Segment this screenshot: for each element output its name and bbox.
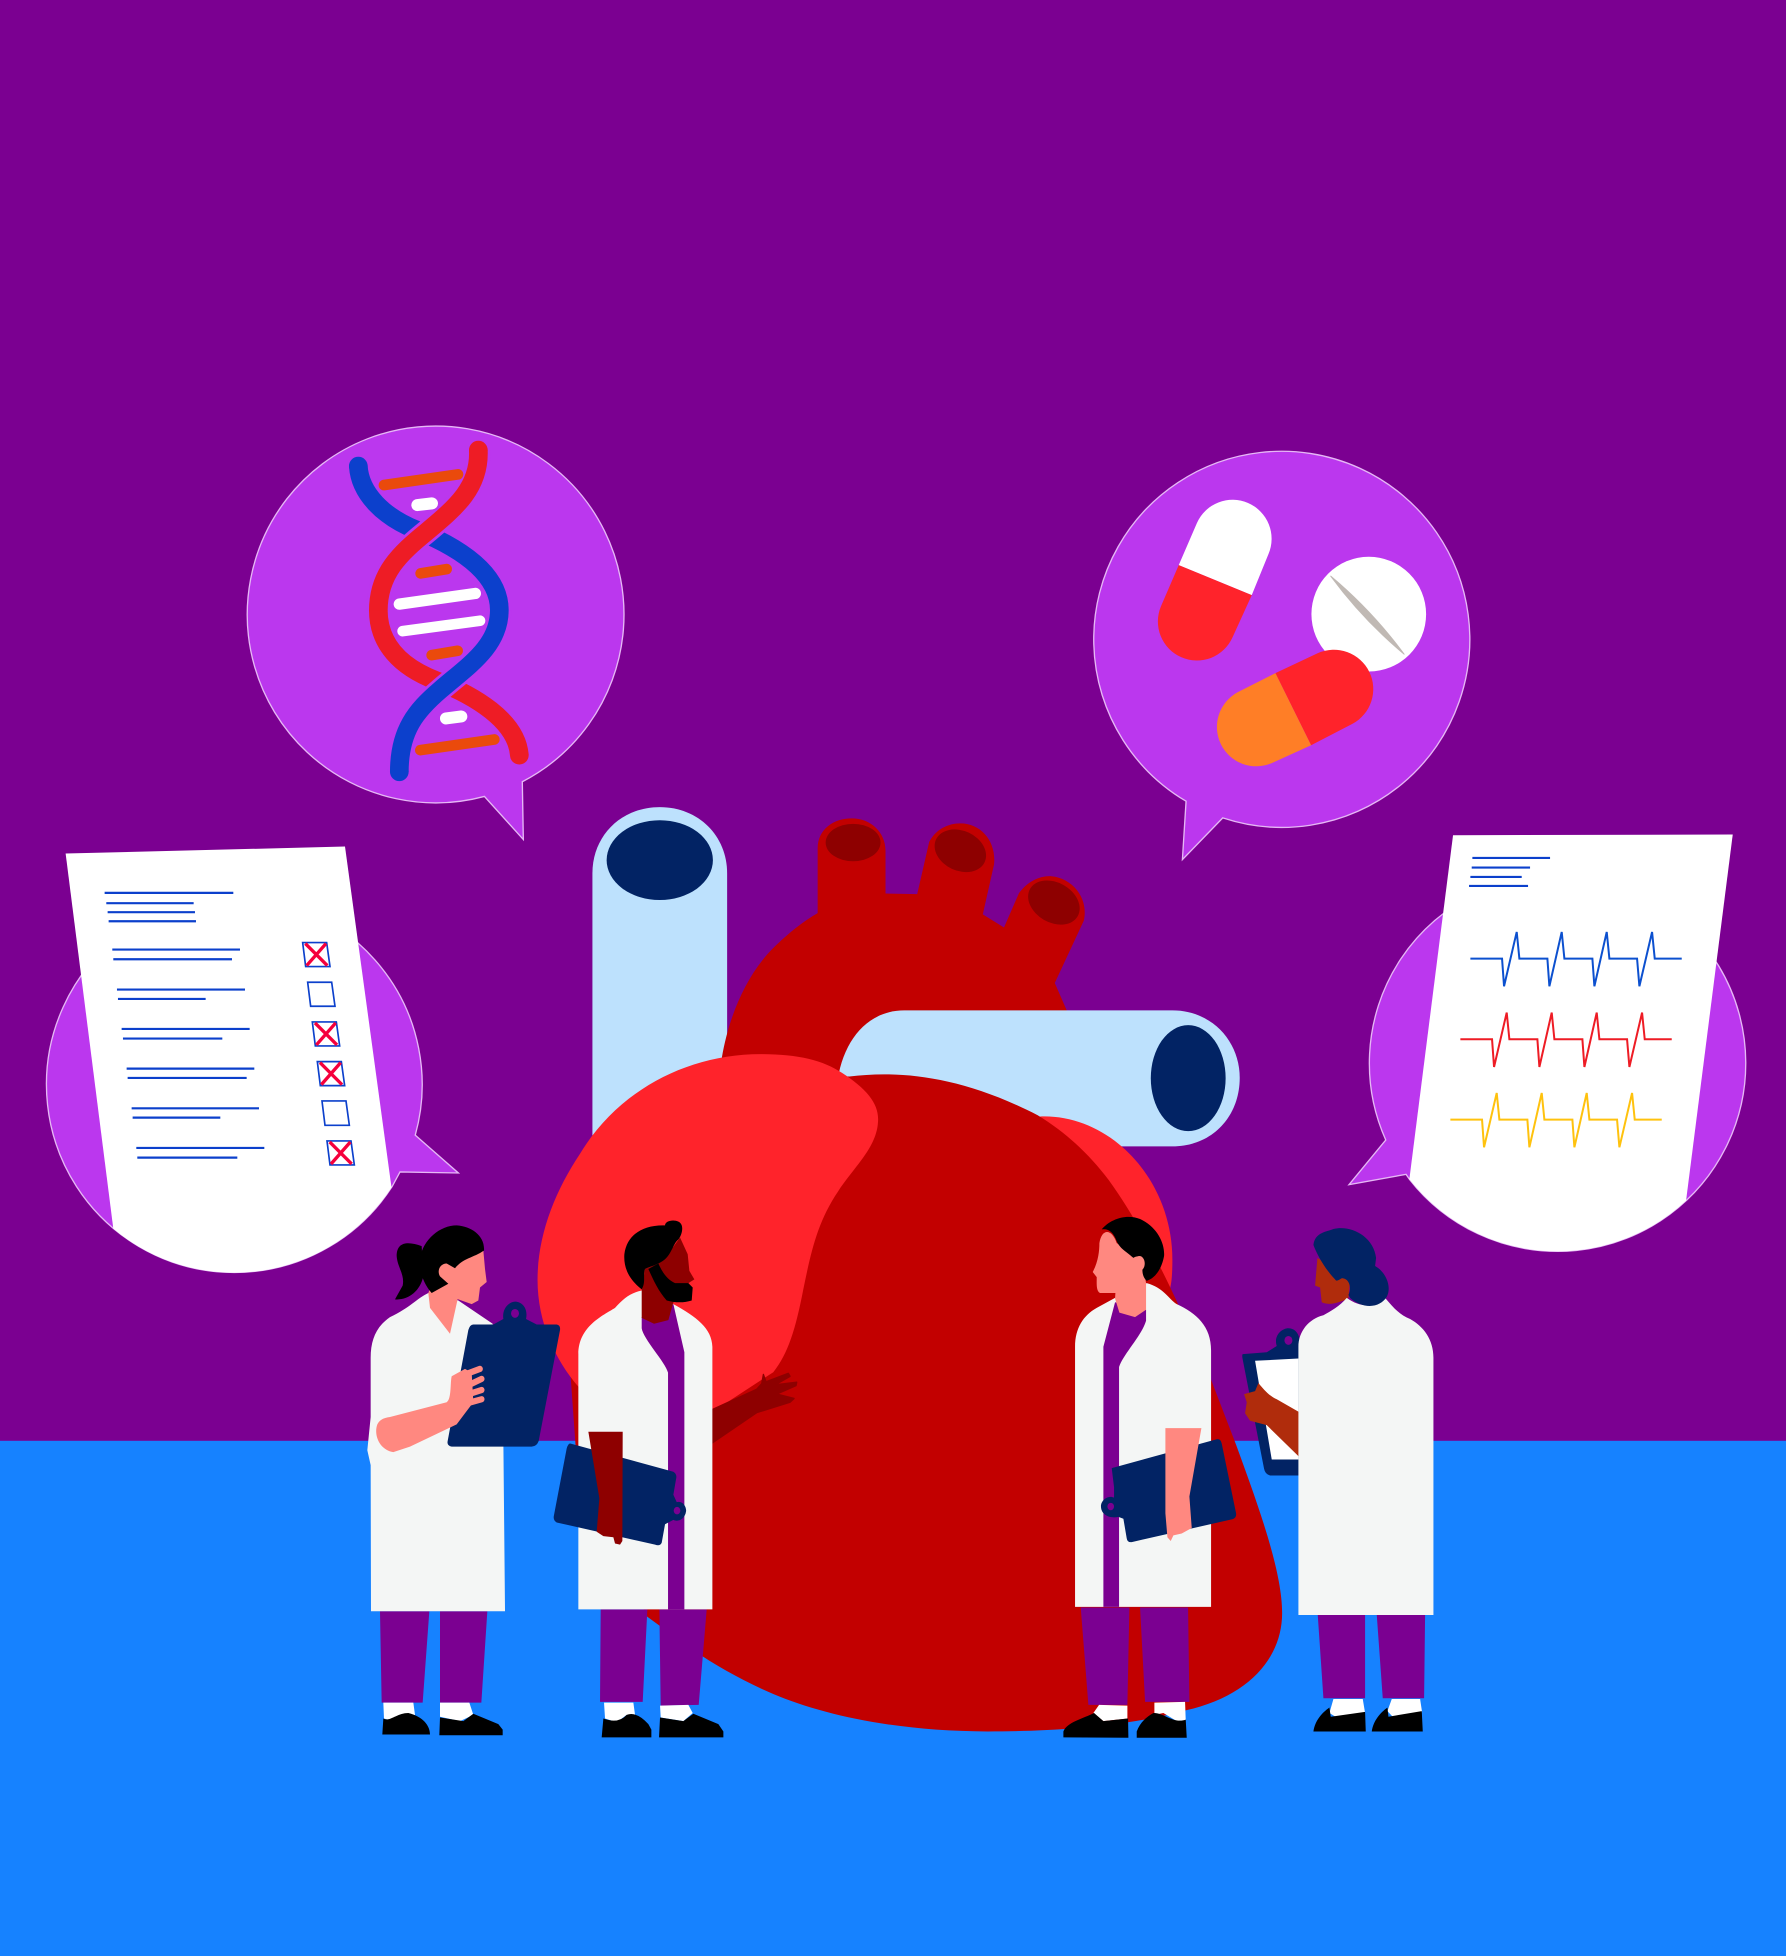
vertical blood vessel xyxy=(592,807,727,1160)
speech bubble: medication xyxy=(1094,451,1470,860)
background: purple wall xyxy=(0,0,1786,1442)
heart: upper chamber with three vessels xyxy=(718,818,1085,1098)
speech bubble: checklist xyxy=(46,847,458,1273)
checkboxes xyxy=(303,943,354,1165)
ECG report text lines xyxy=(1469,858,1550,886)
horizontal blood vessel xyxy=(837,1010,1240,1146)
background: blue floor xyxy=(0,1441,1786,1956)
icon: red and white capsule xyxy=(1158,500,1272,660)
heart: right bright lobe xyxy=(998,1116,1172,1297)
icon: red and orange capsule xyxy=(1217,650,1373,766)
ECG traces xyxy=(1450,932,1682,1147)
speech bubble: ECG report xyxy=(1349,835,1746,1251)
heart: left bright lobe xyxy=(538,1054,878,1412)
doctor 2: man with beard and clipboard xyxy=(554,1220,797,1737)
icon: DNA helix xyxy=(349,441,529,781)
doctor 3: man with short hair and clipboard xyxy=(1063,1217,1236,1738)
speech bubble: DNA xyxy=(247,426,624,840)
doctor 1: woman with clipboard xyxy=(367,1225,560,1735)
checklist text lines xyxy=(105,893,264,1158)
icon: round tablet xyxy=(1311,557,1426,672)
heart xyxy=(538,818,1282,1731)
heart: main dark body xyxy=(561,1073,1282,1731)
checklist paper xyxy=(66,847,392,1273)
ECG paper xyxy=(1409,835,1733,1251)
doctor 4: woman seen from behind with clipboard xyxy=(1242,1228,1433,1732)
heart: vessel openings xyxy=(826,821,1088,934)
